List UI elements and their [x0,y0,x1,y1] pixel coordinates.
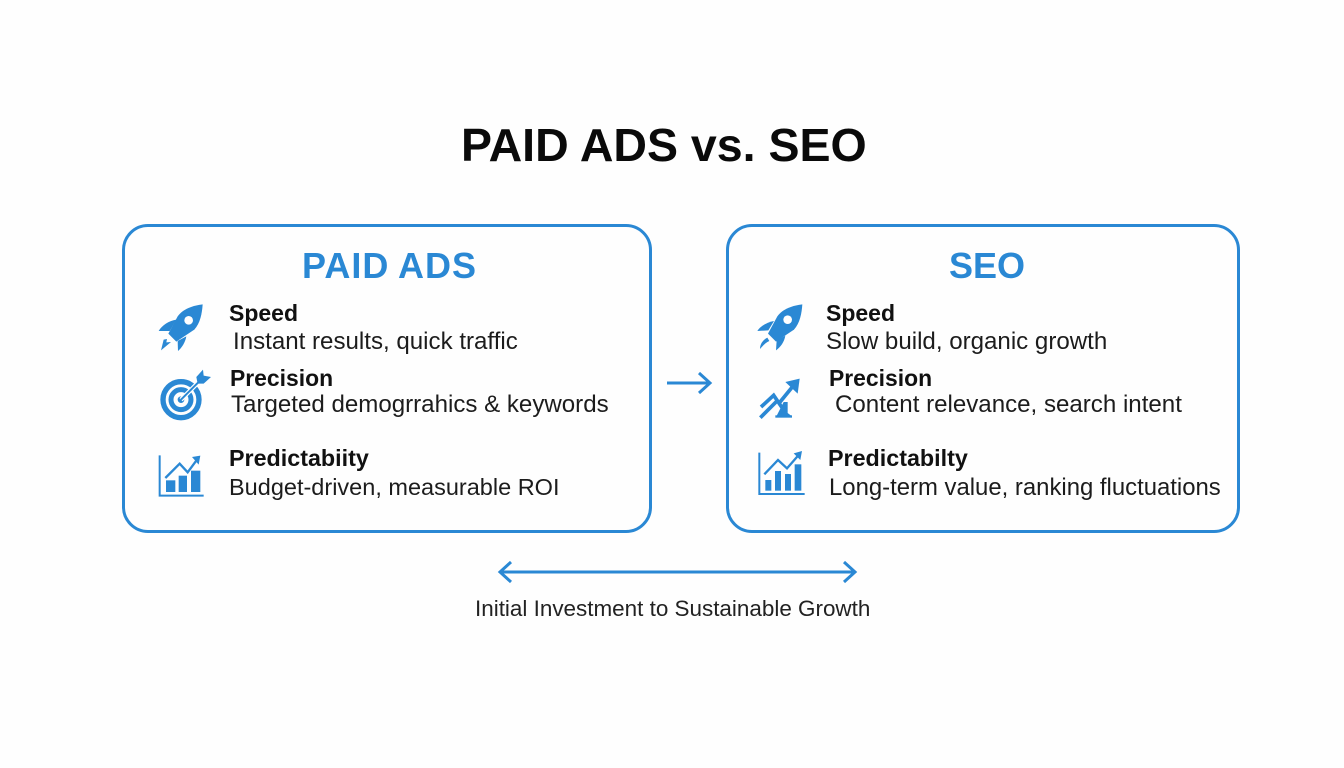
panel heading: paid ads: PAID ADS [302,245,477,286]
text: predictability seo: Predictabilty [828,445,968,471]
panel heading: seo: SEO [949,245,1025,286]
caption: Initial Investment to Sustainable Growth [475,596,870,621]
text: precision description paid: Targeted demogrrahics & keywords [231,391,609,418]
text: predictability description seo: Long-term value, ranking fluctuations [829,474,1221,501]
title: PAID ADS vs. SEO [461,119,867,171]
icon: bar chart paid [158,455,204,497]
icon: growth arrow [759,378,800,419]
icon: target [160,370,211,420]
panel: seo [726,224,1240,533]
text: predictability description paid: Budget-driven, measurable ROI [229,474,559,500]
text: precision paid: Precision [230,365,333,391]
arrow: between panels [667,372,712,394]
icon: rocket [158,304,203,351]
text: speed description seo: Slow build, organic growth [826,328,1107,355]
text: speed description paid: Instant results, quick traffic [233,328,518,355]
text: precision description seo: Content relevance, search intent [835,391,1182,418]
icon: rocket seo [757,304,802,350]
icon: bar chart seo [758,451,805,495]
text: speed seo: Speed [826,300,895,326]
text: speed paid: Speed [229,300,298,326]
panel: paid ads [122,224,652,533]
arrow: double headed [498,560,858,584]
text: predictability paid: Predictabiity [229,445,369,471]
text: precision seo: Precision [829,365,932,391]
